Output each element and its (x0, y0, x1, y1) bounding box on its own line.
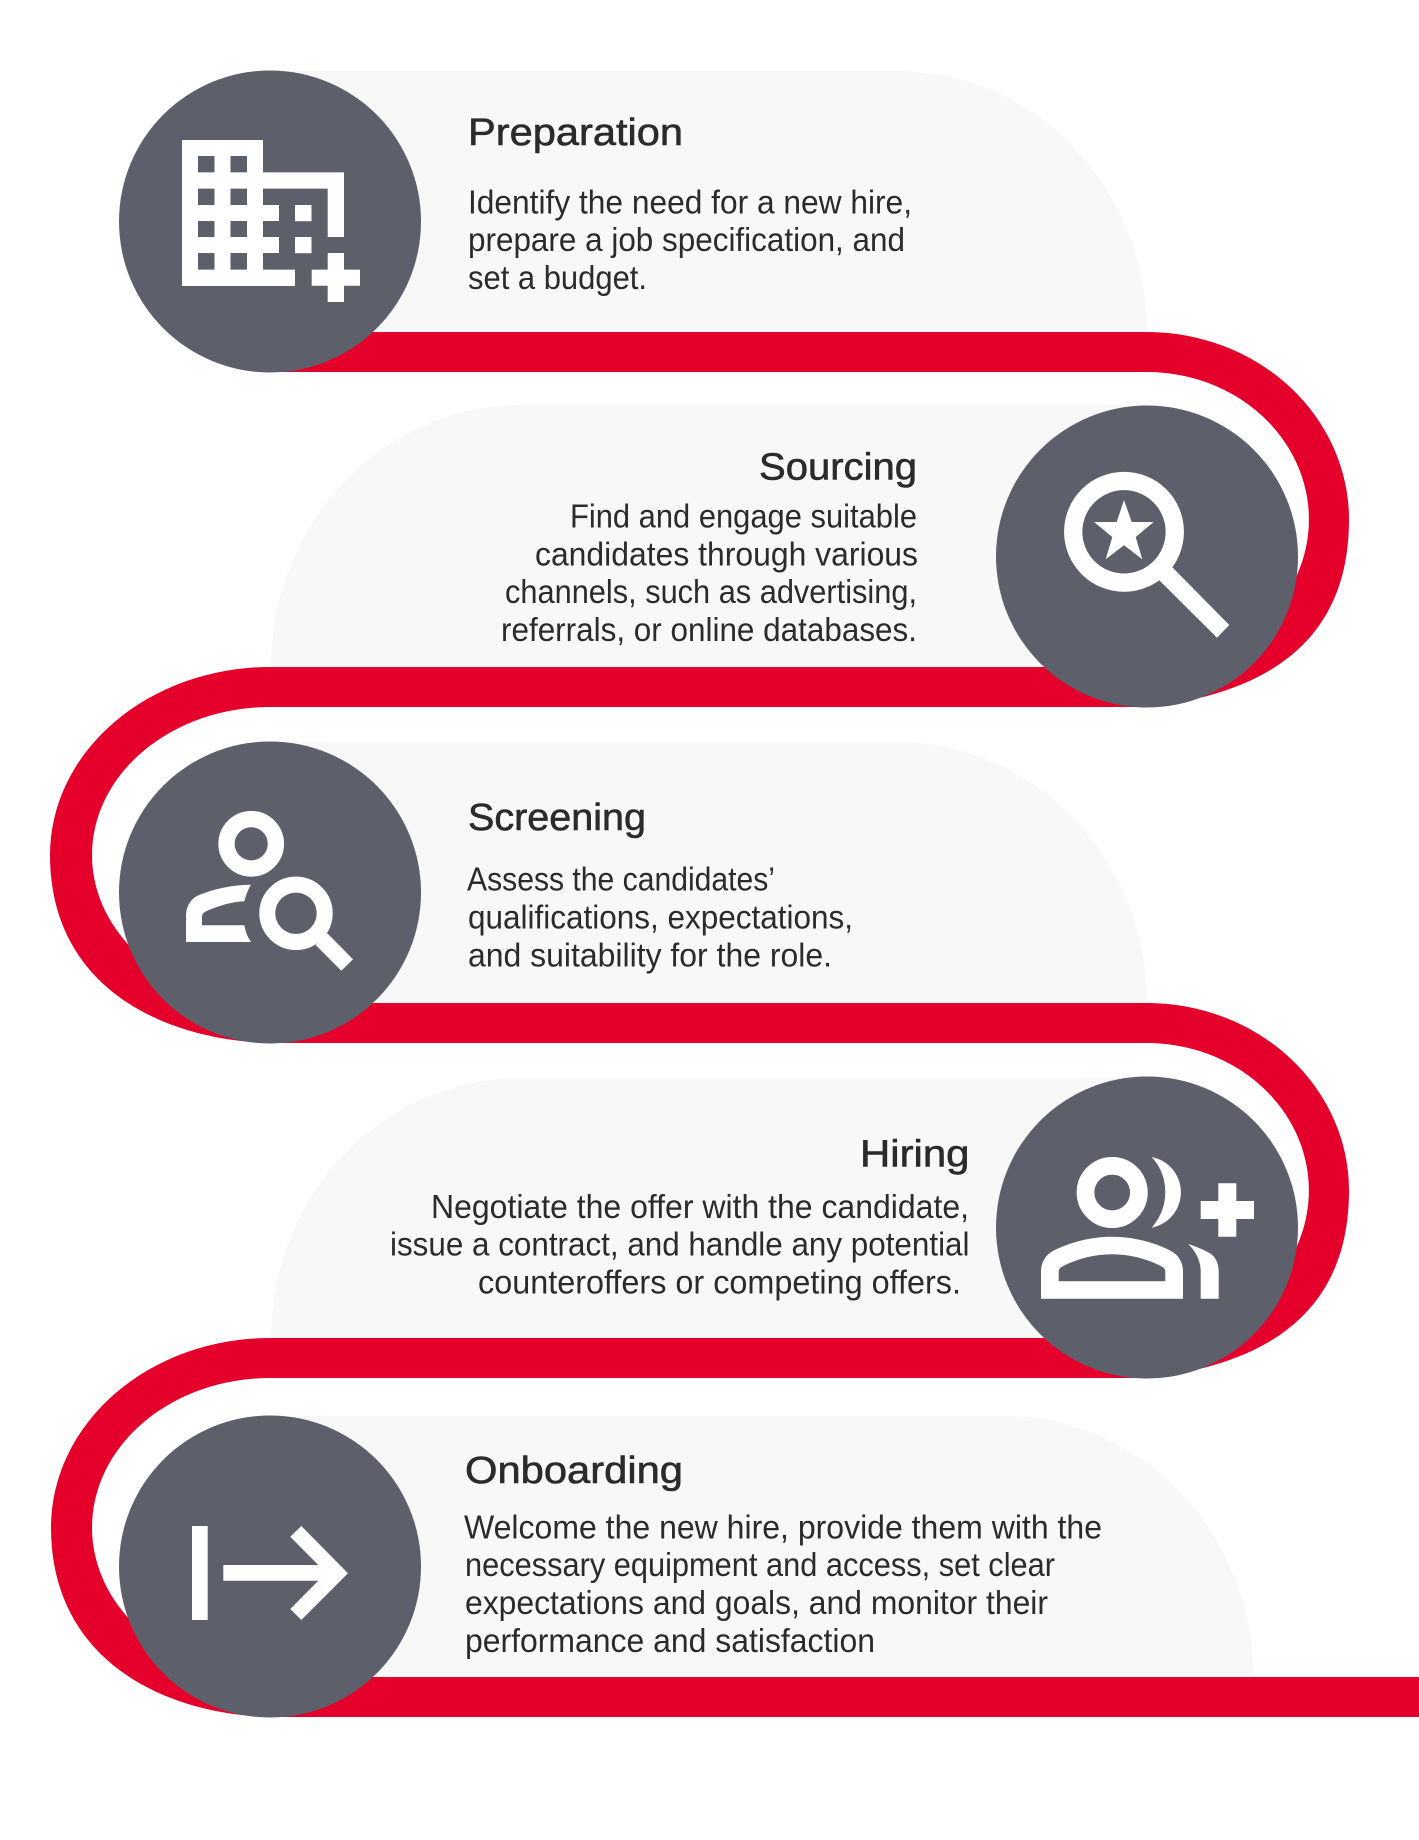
icon: building with plus (182, 140, 360, 302)
circle badge (119, 1416, 421, 1718)
body text: onboarding: necessary equipment and access, set clear (465, 1546, 1055, 1583)
body text: onboarding: Welcome the new hire, provide them with the (464, 1508, 1102, 1546)
body text: sourcing: referrals, or online databases. (501, 611, 917, 648)
icon: arrow to the right from a bar (192, 1526, 348, 1620)
red ribbon path (50, 332, 1419, 1717)
body text: screening: Assess the candidates’ (467, 860, 775, 898)
body text: preparation (468, 184, 912, 296)
panel: screening (119, 742, 1147, 1044)
body text: preparation: set a budget. (468, 259, 647, 296)
icon: people with plus (1041, 1157, 1254, 1299)
circle badge (119, 742, 421, 1044)
body text: hiring: Negotiate the offer with the candidate, (431, 1188, 969, 1225)
panel background (271, 1078, 1147, 1338)
circle badge (119, 70, 421, 372)
body text: onboarding: expectations and goals, and monitor their (465, 1584, 1048, 1621)
body text: preparation: Identify the need for a new hire, (468, 184, 912, 220)
panel: sourcing (271, 405, 1298, 708)
heading: preparation: Preparation (468, 112, 683, 154)
panel background (270, 742, 1147, 1003)
body text: sourcing: candidates through various (535, 536, 918, 572)
panel background (271, 405, 1147, 667)
body text: preparation: prepare a job specification, and (468, 221, 905, 258)
body text: hiring: counteroffers or competing offers. (478, 1264, 961, 1300)
body text: hiring (390, 1188, 970, 1300)
heading: hiring: Hiring (860, 1134, 970, 1176)
body text: screening: qualifications, expectations, (468, 898, 853, 936)
icon: magnifier with star (1073, 481, 1229, 638)
body text: screening: and suitability for the role. (468, 936, 832, 974)
heading: screening: Screening (468, 797, 646, 839)
panel: preparation (119, 70, 1147, 372)
body text: sourcing: Find and engage suitable (570, 498, 917, 534)
panel: hiring (271, 1076, 1298, 1378)
heading: onboarding: Onboarding (465, 1450, 683, 1492)
icon: person with magnifier (186, 819, 353, 971)
body text: sourcing: channels, such as advertising, (505, 573, 917, 610)
circle badge (996, 1076, 1298, 1378)
circle badge (996, 406, 1298, 708)
panel background (270, 71, 1147, 332)
body text: hiring: issue a contract, and handle any potential (390, 1226, 970, 1262)
body text: sourcing (501, 498, 918, 648)
body text: onboarding (464, 1508, 1102, 1659)
heading: sourcing: Sourcing (759, 446, 917, 488)
panel background (270, 1416, 1254, 1677)
panel: onboarding (119, 1416, 1254, 1718)
body text: onboarding: performance and satisfaction (465, 1622, 875, 1659)
body text: screening (467, 860, 853, 974)
